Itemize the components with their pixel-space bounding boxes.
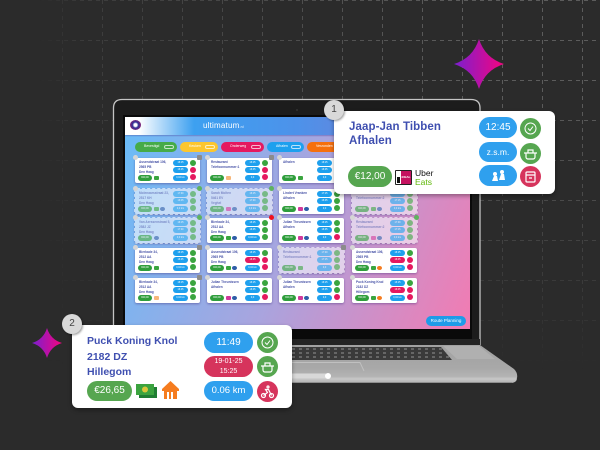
- order card col 4 row 2: 0,0 km: [394, 206, 401, 210]
- order card col 4 row 5: 2182 DZ: [356, 285, 368, 289]
- order card col 2 row 5: €20,00: [213, 296, 221, 299]
- order card col 3 row 4: 17:15: [322, 258, 327, 261]
- order card col 1 row 3: 16:15: [178, 221, 183, 224]
- order card col 1 row 3: 0,0 km: [177, 236, 184, 238]
- icon: Thuisbezorgd: [162, 381, 179, 399]
- order card col 2 row 3: Bierkade 34,: [211, 220, 230, 224]
- order card col 2 row 2: Veghel: [211, 201, 221, 205]
- icon: cash: [136, 384, 157, 398]
- order card col 1 row 5: 2512 AA: [139, 285, 151, 289]
- order card col 1 row 4: Den Haag: [139, 260, 154, 264]
- customer address: [87, 335, 177, 378]
- order card col 3 row 2: 17:15: [322, 192, 327, 195]
- order card col 3 row 5: Afhalen: [283, 285, 295, 289]
- order card col 2 row 4: 16:15: [250, 251, 255, 254]
- order card col 1 row 2: Den Haag: [139, 201, 154, 205]
- order card col 2 row 3: 16:15: [250, 221, 255, 224]
- order card col 4 row 2: Restaurant: [356, 191, 373, 195]
- order card col 3 row 2: Lindert Vranken: [283, 191, 307, 195]
- order card col 1 row 2: 2517 KH: [139, 196, 152, 200]
- order card col 4 row 3: 0,0 km: [394, 236, 401, 238]
- order card col 2 row 3: 0,04 km: [248, 236, 257, 238]
- order card col 2 row 5: 16:15: [250, 281, 255, 284]
- order card col 3 row 2: 16:45: [322, 199, 327, 202]
- order card col 3 row 4: 17:00: [322, 251, 327, 254]
- laptop lid: [114, 100, 480, 345]
- status icon: clock: [520, 118, 541, 139]
- order card col 2 row 4: Den Haag: [211, 260, 226, 264]
- order card col 3 row 3: Julian Theunissen: [283, 220, 311, 224]
- order card col 4 row 3: €20,00: [358, 236, 366, 239]
- order card col 3 row 2: 0,0: [323, 206, 326, 210]
- order card col 3 row 1: 0,0: [323, 176, 326, 178]
- status icon: clock: [257, 332, 278, 353]
- order card col 2 row 5: 16:45: [250, 288, 255, 291]
- order card col 4 row 4: 2565 PB: [356, 255, 368, 259]
- order card col 3 row 4: [279, 248, 344, 272]
- order card col 4 row 3: 17:00: [394, 221, 400, 224]
- order card col 3 row 5: 0,0: [323, 296, 326, 298]
- order card col 1 row 1: [135, 158, 200, 182]
- order card col 2 row 2: 0,0 km: [249, 206, 256, 210]
- order card col 1 row 2: €20,00: [141, 207, 149, 210]
- order card col 4 row 5: €20,00: [358, 296, 366, 299]
- order card col 4 row 2: [352, 189, 417, 214]
- order card col 3 row 3: 16:15: [322, 221, 327, 224]
- order card col 1 row 1: 2565 PB: [139, 165, 151, 169]
- order card col 4 row 5: Puck Koning Knol: [356, 280, 383, 284]
- order card col 1 row 2: 17:00: [178, 192, 183, 195]
- order card col 2 row 2: [207, 189, 272, 214]
- distance pill: [204, 381, 253, 401]
- order card col 2 row 2: 5461 EV: [211, 196, 223, 200]
- order card col 4 row 5: [352, 278, 417, 302]
- order card col 3 row 4: Telefoonnummer:1: [283, 255, 311, 259]
- order card col 4 row 3: Restaurant: [356, 220, 373, 224]
- order card col 4 row 4: 16:15: [394, 251, 400, 254]
- order card col 2 row 5: Afhalen: [211, 285, 223, 289]
- order card col 1 row 3: Den Haag: [139, 230, 154, 234]
- order card col 3 row 1: €20,00: [285, 176, 293, 179]
- order card col 1 row 4: 0,04 km: [176, 266, 185, 268]
- app logo: [130, 120, 141, 130]
- order card col 4 row 2: €20,00: [358, 207, 366, 210]
- order card col 1 row 4: 16:15: [178, 251, 183, 254]
- order card col 1 row 5: [135, 278, 200, 302]
- order card col 1 row 1: 16:45: [178, 168, 183, 171]
- customer name: Jaap-Jan Tibben: [349, 121, 441, 133]
- icon: Uber Eats: Uber: [415, 168, 433, 178]
- time pill: [479, 117, 517, 138]
- badge 1: [324, 100, 344, 120]
- asap pill: [479, 142, 517, 162]
- order card col 4 row 3: [352, 218, 417, 242]
- order card col 1 row 4: [135, 248, 200, 272]
- order card col 1 row 3: Van Aerssenstraat 5,: [139, 220, 170, 224]
- order card col 1 row 1: Den Haag: [139, 170, 154, 174]
- order card col 1 row 5: Den Haag: [139, 290, 154, 294]
- customer address: Hillegom: [87, 366, 131, 378]
- order card col 3 row 5: Julian Theunissen: [283, 280, 311, 284]
- order card col 1 row 4: 16:45: [178, 258, 183, 261]
- status icon: box: [520, 166, 541, 187]
- order card col 1 row 1: Assendstraat 106,: [139, 160, 166, 164]
- order card col 2 row 3: [207, 218, 272, 242]
- order card col 1 row 2: Molenaarsstraat 23,: [139, 191, 169, 195]
- order card col 3 row 5: [279, 278, 344, 302]
- callout card 1: [334, 111, 555, 194]
- order card col 2 row 1: 16:15: [250, 161, 255, 164]
- customer address: 2182 DZ: [87, 350, 127, 362]
- time pill: 11:49: [216, 337, 241, 348]
- order card col 4 row 2: 17:00: [394, 192, 400, 195]
- customer name: Afhalen: [349, 135, 392, 147]
- order card col 4 row 4: 16:45: [394, 258, 400, 261]
- order card col 2 row 3: 16:45: [250, 228, 255, 231]
- order card col 1 row 4: €20,00: [141, 266, 149, 269]
- category filters: [135, 142, 334, 152]
- order card col 4 row 2: Telefoonnummer:2: [356, 196, 384, 200]
- order card col 1 row 1: €20,00: [141, 176, 149, 179]
- order card col 2 row 1: Restaurant: [211, 160, 228, 164]
- price pill: €12,00: [355, 171, 385, 182]
- order card col 3 row 2: €20,00: [285, 207, 293, 210]
- order card col 1 row 2: [135, 189, 200, 214]
- order card col 3 row 3: 16:45: [322, 228, 327, 231]
- order card col 3 row 1: 16:15: [322, 161, 327, 164]
- filter: onderweg: [221, 142, 264, 152]
- order card col 3 row 3: €20,00: [285, 236, 293, 239]
- badge 2: 2: [69, 318, 75, 329]
- order card col 1 row 5: 16:45: [178, 288, 183, 291]
- customer name: [349, 121, 441, 147]
- order card col 2 row 2: €20,00: [213, 207, 221, 210]
- order card col 3 row 5: 16:15: [322, 281, 327, 284]
- app header: [125, 117, 470, 135]
- filter: bevestigd: [135, 142, 177, 152]
- icon: Uber Eats: [415, 168, 434, 186]
- order card col 2 row 4: Assendstraat 106,: [211, 250, 238, 254]
- order card col 2 row 3: 2512 AA: [211, 225, 223, 229]
- order card col 3 row 4: €20,00: [285, 266, 293, 269]
- order card col 3 row 3: 0,0: [323, 236, 326, 238]
- order card col 2 row 1: 0,0: [251, 176, 254, 178]
- order card col 1 row 3: [135, 218, 200, 242]
- order card col 2 row 1: [207, 158, 272, 182]
- filter: afhalen: Afhalen: [276, 144, 288, 148]
- order card col 3 row 1: 16:45: [322, 168, 327, 171]
- order card col 3 row 3: Afhalen: [283, 225, 295, 229]
- order card col 2 row 4: 2565 PB: [211, 255, 223, 259]
- badge 1: 1: [331, 104, 337, 115]
- order card col 3 row 1: [279, 158, 344, 182]
- order card col 2 row 3: Den Haag: [211, 230, 226, 234]
- order card col 2 row 1: €20,00: [213, 176, 221, 179]
- price pill: €26,65: [94, 385, 125, 396]
- order card col 3 row 1: Afhalen: [283, 160, 295, 164]
- order card col 1 row 5: 0,04 km: [176, 296, 185, 298]
- badge 2: [62, 314, 82, 334]
- filter: bevestigd: Bevestigd: [144, 144, 159, 148]
- order card col 2 row 1: Telefoonnummer:1: [211, 165, 239, 169]
- filter: keuken: [180, 142, 218, 152]
- status icon: pot: [257, 356, 278, 377]
- icon: iDEAL: [395, 170, 412, 185]
- filter: keuken: Keuken: [189, 144, 201, 148]
- filter: verzonden: Verzonden: [316, 144, 333, 148]
- filter: afhalen: [267, 142, 304, 152]
- order card col 2 row 2: 17:00: [250, 199, 255, 202]
- order card col 1 row 4: 2512 AA: [139, 255, 151, 259]
- icon: Uber Eats: Eats: [415, 176, 432, 186]
- order card col 2 row 5: Julian Theunissen: [211, 280, 239, 284]
- order card col 1 row 2: 16:45: [178, 199, 183, 202]
- order card col 4 row 2: 17:15: [394, 199, 400, 202]
- price pill: [87, 381, 132, 401]
- order card col 1 row 5: Bierkade 34,: [139, 280, 158, 284]
- customer address: Puck Koning Knol: [87, 335, 177, 347]
- order card col 2 row 5: [207, 278, 272, 302]
- order card col 2 row 3: €20,00: [213, 236, 221, 239]
- time pill: 12:45: [485, 122, 511, 133]
- order card col 2 row 5: 0,0: [251, 296, 254, 298]
- distance pill: 0.06 km: [212, 385, 245, 396]
- callout card 2: [72, 325, 292, 408]
- order card col 1 row 2: 0,0 km: [177, 206, 184, 210]
- order card col 4 row 5: 16:15: [394, 281, 400, 284]
- order card col 2 row 4: 0,04 km: [248, 266, 257, 268]
- order card col 3 row 2: Afhalen: [283, 196, 295, 200]
- route planning button: Route Planning: [431, 318, 461, 323]
- date pill: 19-01-25: [214, 358, 243, 365]
- delivery type pill: [479, 165, 517, 186]
- order card col 2 row 4: [207, 248, 272, 272]
- price pill: [348, 166, 392, 187]
- order card col 1 row 5: 16:15: [178, 281, 183, 284]
- laptop base: [77, 345, 517, 383]
- asap pill: z.s.m.: [487, 147, 509, 157]
- status icon: courier: [257, 381, 278, 402]
- order card col 2 row 4: €20,00: [213, 266, 221, 269]
- order card col 4 row 4: Den Haag: [356, 260, 371, 264]
- order card col 4 row 5: 0,04 km: [393, 296, 402, 298]
- order card col 1 row 3: €20,00: [141, 236, 149, 239]
- order card col 4 row 3: 17:15: [394, 228, 400, 231]
- filter: onderweg: Onderweg: [230, 144, 246, 148]
- app screen: [125, 117, 470, 329]
- background grid: [62, 0, 596, 322]
- order card col 1 row 5: €20,00: [141, 296, 149, 299]
- order card col 4 row 4: [352, 248, 417, 272]
- order card col 4 row 3: Telefoonnummer:2: [356, 225, 384, 229]
- order card col 4 row 5: 16:45: [394, 288, 400, 291]
- order card col 2 row 1: 16:45: [250, 168, 255, 171]
- order card col 2 row 2: 16:15: [250, 192, 255, 195]
- order card col 3 row 4: Restaurant: [283, 250, 300, 254]
- icon: iDEAL: iDEAL: [402, 175, 410, 179]
- route planning button: [426, 316, 466, 326]
- status icon: pot: [520, 143, 541, 164]
- order card col 1 row 3: 2582 JZ: [139, 225, 151, 229]
- filter: verzonden: [307, 142, 347, 152]
- order card col 3 row 3: [279, 218, 344, 242]
- order card col 4 row 5: Hillegom: [356, 290, 369, 294]
- order card col 4 row 4: 0,04 km: [393, 266, 402, 268]
- order card col 1 row 1: 0,04 km: [176, 176, 185, 178]
- order card col 3 row 2: [279, 189, 344, 214]
- order card grid: [133, 155, 419, 306]
- order card col 4 row 4: €20,00: [358, 266, 366, 269]
- date pill: [204, 356, 253, 377]
- order card col 3 row 4: 0,0: [323, 266, 326, 268]
- app name: ultimatum.nl: [203, 121, 244, 130]
- order card col 3 row 5: 16:45: [322, 288, 327, 291]
- time pill: [204, 332, 253, 353]
- order card col 2 row 2: Sarah Molten: [211, 191, 231, 195]
- date pill: 15:25: [220, 368, 237, 375]
- order card col 1 row 4: Bierkade 34,: [139, 250, 158, 254]
- order card col 2 row 4: 16:45: [250, 258, 255, 261]
- order card col 3 row 5: €20,00: [285, 296, 293, 299]
- order card col 1 row 3: 17:00: [178, 228, 183, 231]
- order card col 4 row 4: Assendstraat 106,: [356, 250, 383, 254]
- order card col 1 row 1: 16:15: [178, 161, 183, 164]
